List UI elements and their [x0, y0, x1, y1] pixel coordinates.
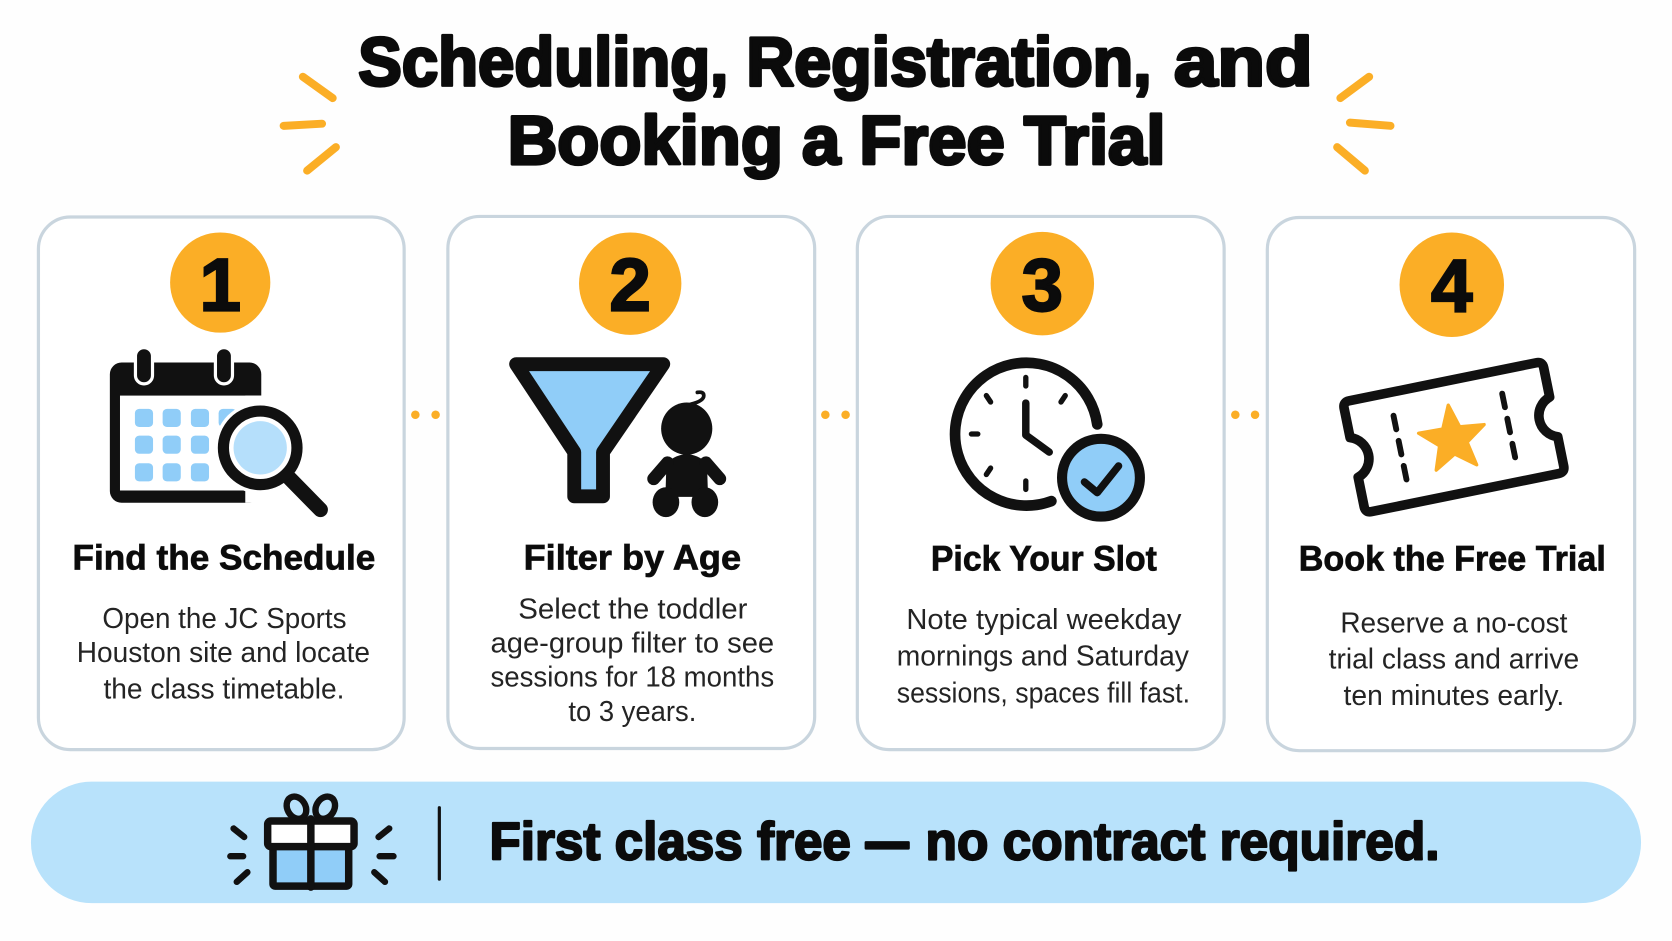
- text: step 4 description: ten minutes early.: [1344, 679, 1564, 711]
- text: banner message: —: [866, 812, 909, 871]
- text: step 3 description: sessions, spaces fill fast.: [897, 677, 1190, 709]
- step number 4: 4: [1431, 243, 1473, 327]
- icon: ticket with star: [1343, 361, 1565, 513]
- text: step 3 description: Note typical weekday: [906, 603, 1182, 635]
- panel: step 4 book the free trial: [1267, 218, 1635, 751]
- heading: filter by age: Filter by Age: [524, 538, 741, 577]
- heading: find the schedule: Find the Schedule: [73, 538, 375, 577]
- connector dots 2 to 3: [821, 411, 850, 419]
- step number 1: 1: [199, 242, 241, 326]
- icon: clock with check badge: [955, 363, 1140, 517]
- title: Booking a Free Trial: [508, 103, 1165, 179]
- icon: calendar with magnifier: [110, 348, 320, 510]
- panel: step 2 filter by age: [448, 216, 815, 749]
- icon: baby silhouette: [653, 392, 720, 517]
- text: banner message: [489, 812, 1440, 871]
- icon: left title sparkle: [284, 77, 336, 171]
- text: step 2 description: to 3 years.: [568, 695, 696, 727]
- heading: book the free trial: Book the Free Trial: [1299, 539, 1606, 578]
- text: step 2 description: age-group filter to see: [491, 627, 774, 659]
- step number 2: [579, 232, 681, 335]
- panel: step 1 find the schedule: [38, 217, 404, 750]
- text: step 2 description: sessions for 18 months: [491, 661, 774, 693]
- text: step 1 description: the class timetable.: [103, 672, 344, 704]
- text: step 3 description: [897, 603, 1190, 709]
- text: step 2 description: [491, 592, 774, 727]
- callout banner: first class free: [31, 782, 1641, 903]
- icon: right title sparkle: [1337, 77, 1390, 171]
- divider: [438, 806, 441, 881]
- title: [358, 24, 1313, 179]
- icon: funnel: [516, 364, 663, 496]
- text: step 4 description: [1329, 606, 1579, 711]
- text: banner message: no contract required.: [926, 812, 1440, 871]
- text: step 1 description: Open the JC Sports: [102, 602, 347, 634]
- connector dots 1 to 2: [411, 411, 440, 419]
- heading: pick your slot: Pick Your Slot: [931, 539, 1157, 578]
- text: banner message: First class free: [489, 812, 851, 871]
- text: step 1 description: Houston site and locate: [77, 636, 370, 668]
- text: step 1 description: [77, 602, 370, 704]
- step number 2: 2: [609, 242, 651, 326]
- step number 3: 3: [1022, 242, 1063, 326]
- connector dots 3 to 4: [1231, 411, 1259, 419]
- text: step 4 description: Reserve a no-cost: [1340, 606, 1568, 638]
- step number 3: [991, 232, 1094, 335]
- icon: gift box: [230, 793, 393, 887]
- step number 4: [1400, 232, 1504, 337]
- text: step 2 description: Select the toddler: [518, 592, 747, 624]
- title: and: [1174, 24, 1313, 100]
- step number 1: [170, 232, 270, 333]
- text: step 4 description: trial class and arrive: [1329, 643, 1579, 675]
- text: step 3 description: mornings and Saturday: [897, 639, 1190, 671]
- panel: step 3 pick your slot: [857, 216, 1224, 750]
- title: Scheduling,: [358, 24, 728, 100]
- title: Registration,: [746, 24, 1152, 100]
